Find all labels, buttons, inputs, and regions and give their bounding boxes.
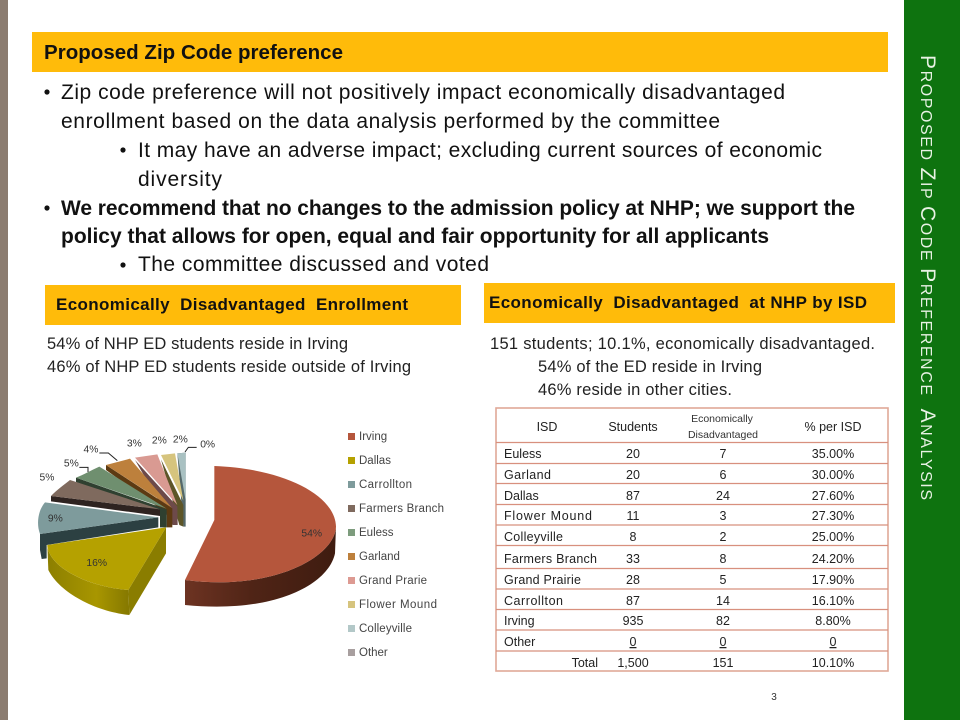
- table rows: Flower Mound: [504, 509, 592, 523]
- bullet list: [44, 81, 855, 276]
- table rows: 27.60%: [812, 489, 854, 503]
- table rows: Carrollton: [504, 594, 563, 608]
- data labels: 2%: [173, 435, 188, 446]
- table header: % per ISD: [805, 420, 861, 434]
- bullet list: policy that allows for open, equal and fair opportunity for all applicants: [61, 225, 769, 248]
- data labels: 2%: [152, 436, 167, 447]
- table rows: 87: [626, 489, 640, 503]
- table rows: 0: [630, 635, 637, 649]
- table rows: Farmers Branch: [504, 552, 597, 566]
- chart legend: Euless: [359, 527, 394, 539]
- table rows: Euless: [504, 447, 542, 461]
- bullet list: enrollment based on the data analysis performed by the committee: [61, 110, 720, 133]
- table rows: 8.80%: [815, 614, 851, 628]
- table rows: 1,500: [617, 656, 649, 670]
- text: ISD summary: 46% reside in other cities.: [538, 381, 732, 399]
- table rows: Other: [504, 635, 535, 649]
- slice: Grand Prairie: [135, 454, 178, 525]
- text: enrollment summary: 46% of NHP ED students reside outside of Irving: [47, 358, 411, 376]
- right sidebar: [904, 0, 960, 720]
- table rows: Grand Prairie: [504, 573, 581, 587]
- subheading: economically disadvantaged at NHP by ISD: [484, 283, 895, 323]
- data labels: 5%: [64, 459, 79, 470]
- heading: proposed zip code preference: Proposed Zip Code preference: [44, 41, 343, 64]
- chart legend: Garland: [359, 551, 400, 563]
- table rows: 0: [720, 635, 727, 649]
- table rows: 24.20%: [812, 552, 854, 566]
- data labels: 3%: [127, 438, 142, 449]
- slice: Farmers Branch: [51, 480, 160, 516]
- table header: ISD: [537, 420, 557, 434]
- data labels: 16%: [86, 558, 107, 569]
- table rows: 2: [720, 530, 727, 544]
- table rows: 11: [627, 509, 640, 523]
- text: ISD summary: 151 students; 10.1%, economically disadvantaged.: [490, 335, 875, 353]
- sidebar title: P ROPOSED Z IP C ODE P REFERENCE A NALYSIS: [916, 55, 939, 500]
- subheading: economically disadvantaged enrollment: Economically Disadvantaged Enrollment: [56, 295, 408, 314]
- table rows: 33: [626, 552, 640, 566]
- table rows: 14: [716, 594, 730, 608]
- table rows: 87: [626, 594, 640, 608]
- table rows: 8: [630, 530, 637, 544]
- 3D pie chart: [38, 435, 336, 615]
- chart legend: Farmers Branch: [359, 503, 444, 515]
- bullet list: The committee discussed and voted: [138, 253, 489, 276]
- data labels: 0%: [200, 440, 215, 451]
- text: ISD summary: 54% of the ED reside in Irving: [538, 358, 762, 376]
- slice: Carrollton: [38, 502, 158, 559]
- table rows: Dallas: [504, 489, 539, 503]
- chart legend: Dallas: [359, 455, 391, 467]
- text: enrollment summary: [47, 335, 411, 376]
- slice: Dallas: [47, 527, 166, 615]
- subheading: economically disadvantaged enrollment: [45, 285, 461, 325]
- table rows: 0: [830, 635, 837, 649]
- slice: Flower Mound: [161, 453, 183, 527]
- slice: Garland: [106, 459, 172, 527]
- data labels: 54%: [301, 529, 322, 540]
- bullet list: We recommend that no changes to the admission policy at NHP; we support the: [61, 197, 855, 220]
- text: ISD summary: [490, 335, 875, 399]
- table rows: 17.90%: [812, 573, 854, 587]
- table rows: 7: [720, 447, 727, 461]
- table rows: 3: [720, 509, 727, 523]
- ISD table: [496, 408, 888, 671]
- data labels: 5%: [40, 473, 54, 484]
- table header: Students: [608, 420, 658, 434]
- slice: Euless: [76, 467, 167, 527]
- table rows: 27.30%: [812, 509, 854, 523]
- table rows: 28: [626, 573, 640, 587]
- table rows: 5: [720, 573, 727, 587]
- table rows: 6: [720, 468, 727, 482]
- table rows: 20: [626, 468, 640, 482]
- data labels: 4%: [84, 445, 98, 456]
- table rows: Irving: [504, 614, 535, 628]
- page number: 3: [771, 692, 777, 703]
- slice: Irving: [185, 466, 336, 607]
- table rows: Total: [572, 656, 598, 670]
- table rows: 25.00%: [812, 530, 854, 544]
- bullet list: It may have an adverse impact; excluding current sources of economic: [138, 139, 822, 162]
- table rows: 935: [623, 614, 643, 628]
- table rows: Colleyville: [504, 530, 563, 544]
- chart legend: Other: [359, 647, 388, 659]
- text: enrollment summary: 54% of NHP ED students reside in Irving: [47, 335, 348, 353]
- table rows: 30.00%: [812, 468, 854, 482]
- table rows: 16.10%: [812, 594, 854, 608]
- chart legend: Grand Prarie: [359, 575, 427, 587]
- table header: Disadvantaged: [688, 429, 758, 441]
- chart legend: Colleyville: [359, 623, 412, 635]
- left edge bar: [0, 0, 8, 720]
- slice: Colleyville: [177, 453, 186, 527]
- table rows: 8: [720, 552, 727, 566]
- bullet list: Zip code preference will not positively impact economically disadvantaged: [61, 81, 785, 104]
- table rows: 151: [713, 656, 733, 670]
- chart legend: Irving: [359, 431, 387, 443]
- table rows: 20: [626, 447, 640, 461]
- data labels: 9%: [48, 514, 63, 525]
- table rows: 24: [716, 489, 730, 503]
- chart legend: [348, 431, 444, 659]
- table rows: [504, 447, 854, 670]
- heading: proposed zip code preference: [32, 32, 888, 72]
- table header: [537, 413, 861, 441]
- table rows: 82: [716, 614, 730, 628]
- bullet list: diversity: [138, 168, 222, 191]
- table rows: 10.10%: [812, 656, 854, 670]
- chart legend: Carrollton: [359, 479, 412, 491]
- chart legend: Flower Mound: [359, 599, 437, 611]
- data labels: [40, 435, 322, 569]
- subheading: economically disadvantaged at NHP by ISD: Economically Disadvantaged at NHP by ISD: [489, 293, 867, 312]
- table rows: 35.00%: [812, 447, 854, 461]
- table rows: Garland: [504, 468, 551, 482]
- table header: Economically: [691, 413, 754, 425]
